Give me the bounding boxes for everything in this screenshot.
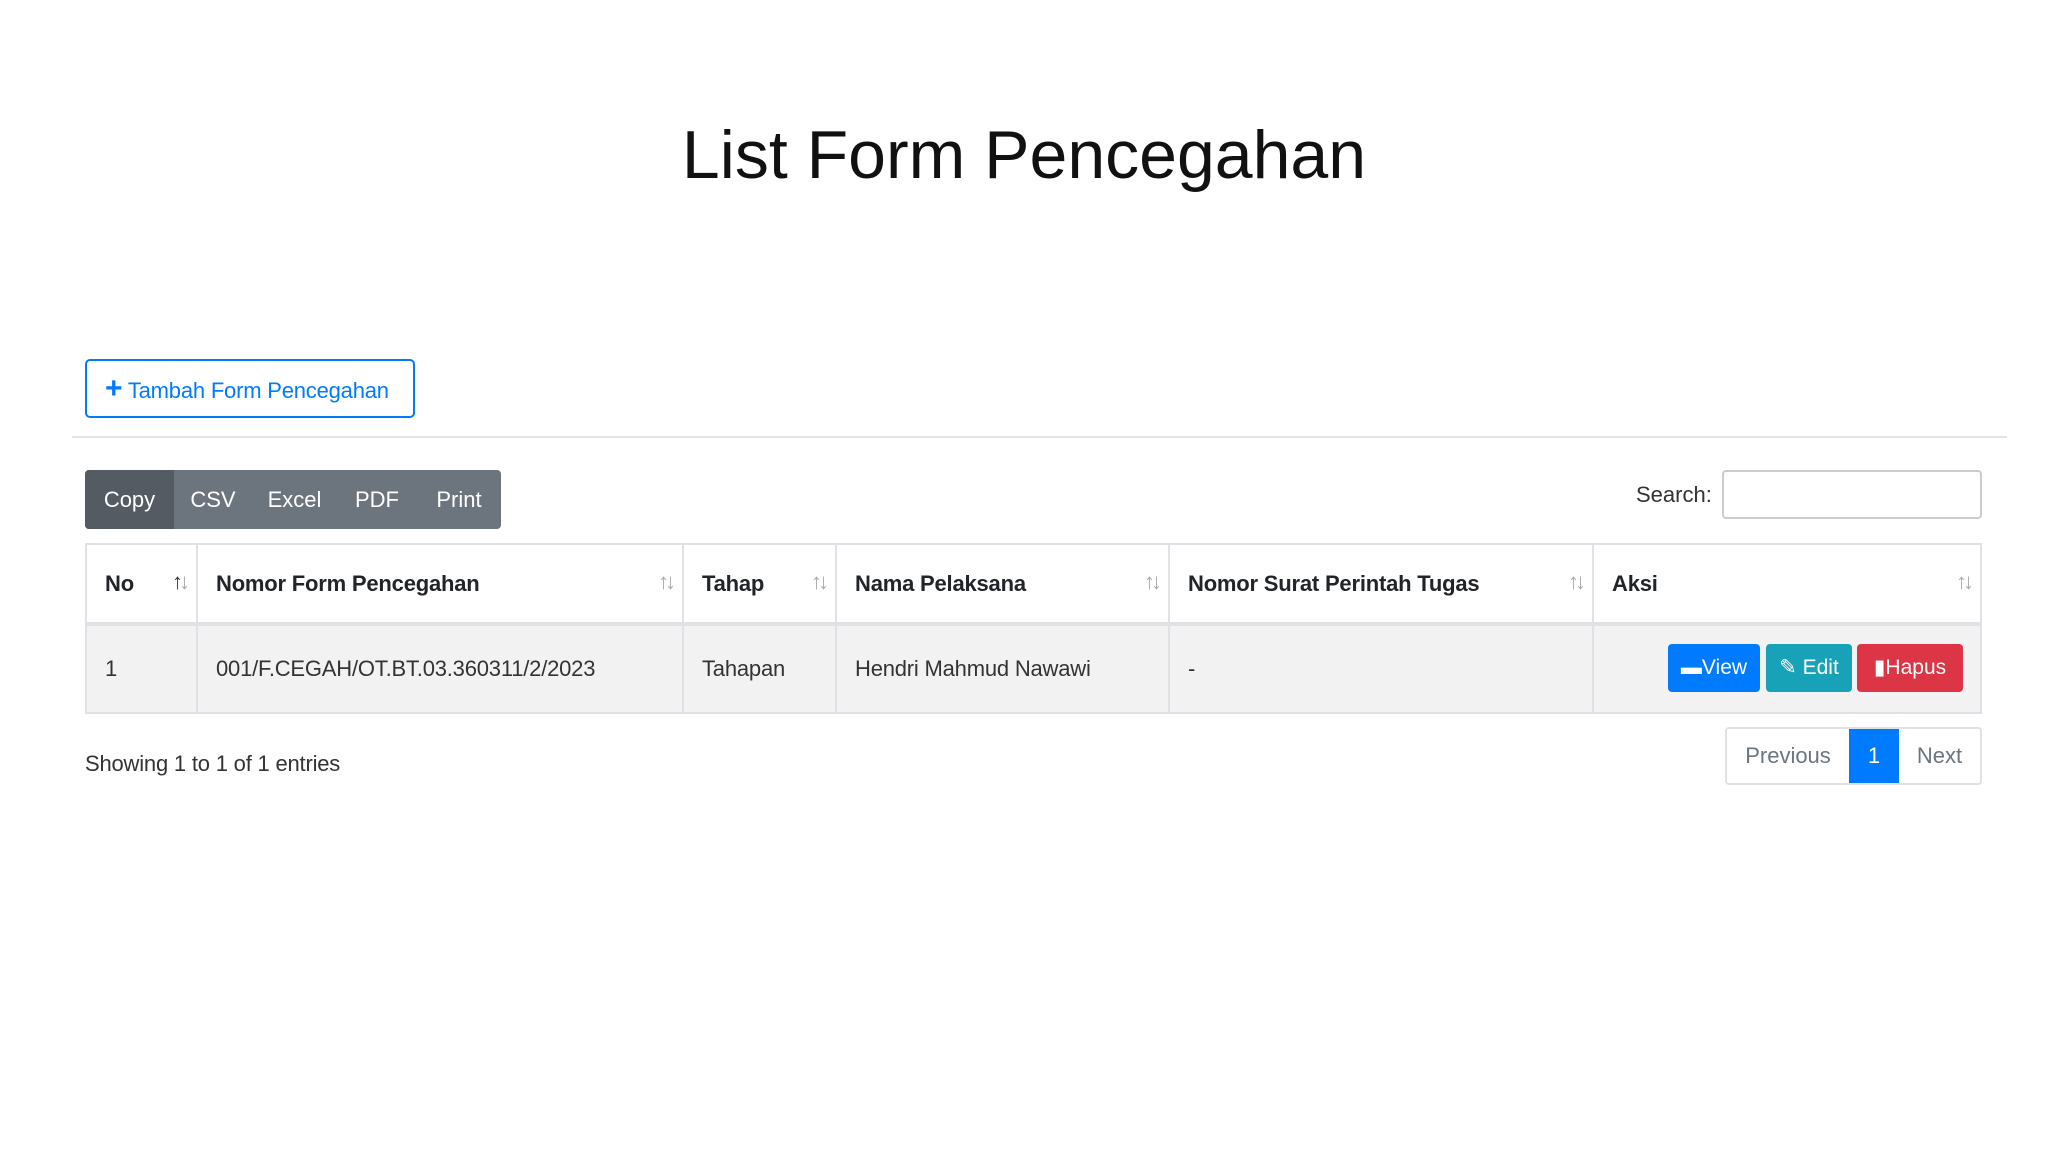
action buttons — [1668, 644, 1760, 692]
table: No — [105, 570, 134, 596]
export buttons: PDF — [355, 487, 399, 512]
table: Nomor Form Pencegahan — [216, 570, 480, 596]
add button — [85, 359, 415, 418]
table: ↑↓ — [811, 569, 825, 594]
table: Nama Pelaksana — [855, 570, 1026, 596]
action buttons: ▬View — [1681, 656, 1747, 679]
info: Showing 1 to 1 of 1 entries — [85, 751, 340, 776]
export buttons: Print — [436, 487, 482, 512]
export buttons: Copy — [104, 487, 155, 512]
export buttons — [85, 470, 501, 529]
table: Hendri Mahmud Nawawi — [855, 656, 1091, 681]
table: ↑↓ — [1956, 569, 1970, 594]
table: ↑↓ — [1144, 569, 1158, 594]
export buttons: CSV — [190, 487, 236, 512]
table — [85, 543, 1982, 714]
table: Nomor Surat Perintah Tugas — [1188, 570, 1479, 596]
export buttons: Excel — [268, 487, 321, 512]
add button: + Tambah Form Pencegahan — [105, 372, 389, 405]
text: ✎ Edit — [1779, 656, 1839, 679]
table: ↑↓ — [658, 569, 672, 594]
table: 1 — [105, 656, 117, 681]
pagination: Next — [1917, 743, 1962, 768]
pagination — [1725, 727, 1982, 785]
text: ▮Hapus — [1874, 656, 1946, 679]
table: 001/F.CEGAH/OT.BT.03.360311/2/2023 — [216, 656, 595, 681]
table: Tahap — [702, 570, 764, 596]
search: Search: — [1636, 482, 1712, 507]
title: List Form Pencegahan — [682, 117, 1366, 193]
table: Aksi — [1612, 570, 1658, 596]
table: Tahapan — [702, 656, 785, 681]
table: ↑↓ — [172, 569, 186, 594]
table: - — [1188, 656, 1195, 681]
pagination: 1 — [1868, 743, 1880, 768]
table: ↑↓ — [1568, 569, 1582, 594]
pagination: Previous — [1745, 743, 1831, 768]
